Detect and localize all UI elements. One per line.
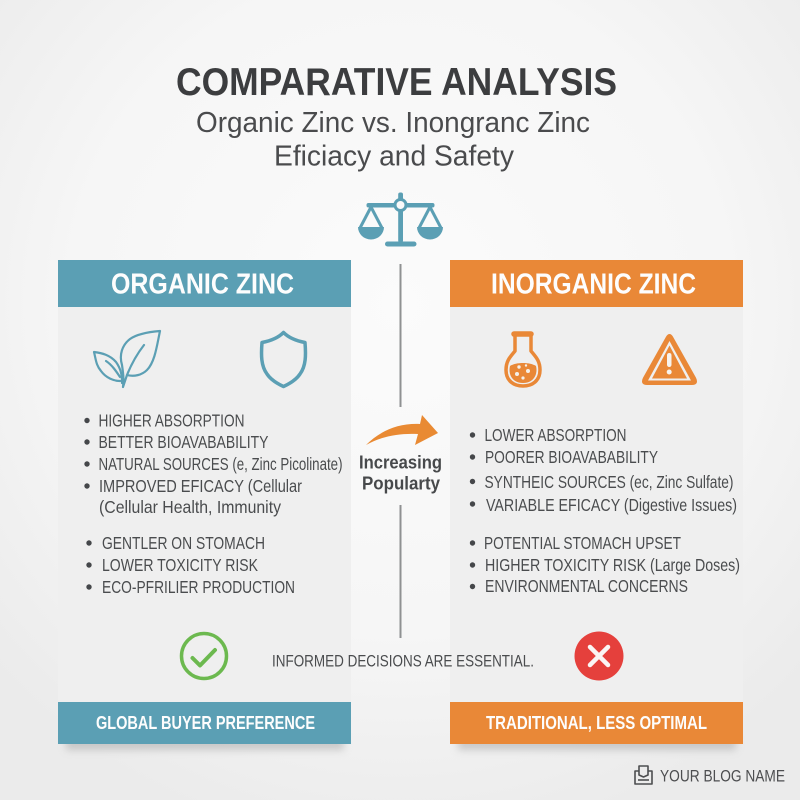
label: increasing popularity: Increasing	[359, 452, 442, 472]
organic benefits list: IMPROVED EFICACY (Cellular	[99, 476, 302, 496]
organic benefits list: (Cellular Health, Immunity	[99, 497, 281, 517]
panel: inorganic zinc	[450, 260, 743, 750]
inorganic drawbacks list: VARIABLE EFICACY (Digestive Issues)	[486, 495, 737, 515]
center divider line	[400, 264, 402, 638]
organic benefits list: LOWER TOXICITY RISK	[102, 555, 258, 575]
organic footer	[58, 702, 351, 744]
organic benefits list: HIGHER ABSORPTION	[98, 410, 244, 430]
icon: warning triangle	[643, 335, 696, 384]
organic header: ORGANIC ZINC	[111, 268, 294, 300]
subtitle: Eficiacy and Safety	[274, 140, 514, 172]
organic benefits list: BETTER BIOAVABABILITY	[98, 432, 269, 452]
subtitle	[196, 107, 590, 172]
inorganic drawbacks list: SYNTHEIC SOURCES (ec, Zinc Sulfate)	[484, 472, 734, 492]
inorganic drawbacks list: ENVIRONMENTAL CONCERNS	[485, 576, 688, 596]
label: increasing popularity: Popularty	[362, 472, 441, 494]
inorganic drawbacks list: POTENTIAL STOMACH UPSET	[484, 533, 681, 553]
inorganic drawbacks list: POORER BIOAVABABILITY	[485, 447, 658, 467]
arrow: increasing popularity	[366, 415, 438, 445]
icon: balance scale	[358, 192, 443, 246]
icon: flask	[506, 332, 540, 386]
icon: red cross	[574, 632, 624, 680]
icon: green check	[182, 634, 226, 678]
panel: organic zinc	[58, 260, 351, 750]
inorganic drawbacks list: LOWER ABSORPTION	[484, 425, 626, 445]
title: COMPARATIVE ANALYSIS	[176, 61, 617, 104]
informed decisions statement: INFORMED DECISIONS ARE ESSENTIAL.	[272, 652, 534, 670]
organic benefits list: ECO-PFRILIER PRODUCTION	[102, 577, 295, 597]
inorganic header: INORGANIC ZINC	[491, 268, 696, 300]
icon: shield	[262, 332, 305, 386]
organic benefits list	[84, 410, 343, 597]
inorganic drawbacks list	[470, 425, 740, 596]
icon: leaves	[94, 331, 160, 387]
inorganic footer: TRADITIONAL, LESS OPTIMAL	[486, 712, 707, 733]
organic footer: GLOBAL BUYER PREFERENCE	[96, 712, 315, 733]
inorganic header	[450, 260, 743, 307]
icon: blog badge	[635, 766, 652, 784]
subtitle: Organic Zinc vs. Inongranc Zinc	[196, 107, 590, 139]
organic benefits list: GENTLER ON STOMACH	[102, 533, 265, 553]
inorganic footer	[450, 702, 743, 744]
organic benefits list: NATURAL SOURCES (e, Zinc Picolinate)	[98, 454, 342, 474]
label: increasing popularity	[359, 452, 442, 494]
organic header	[58, 260, 351, 307]
inorganic drawbacks list: HIGHER TOXICITY RISK (Large Doses)	[485, 555, 740, 575]
